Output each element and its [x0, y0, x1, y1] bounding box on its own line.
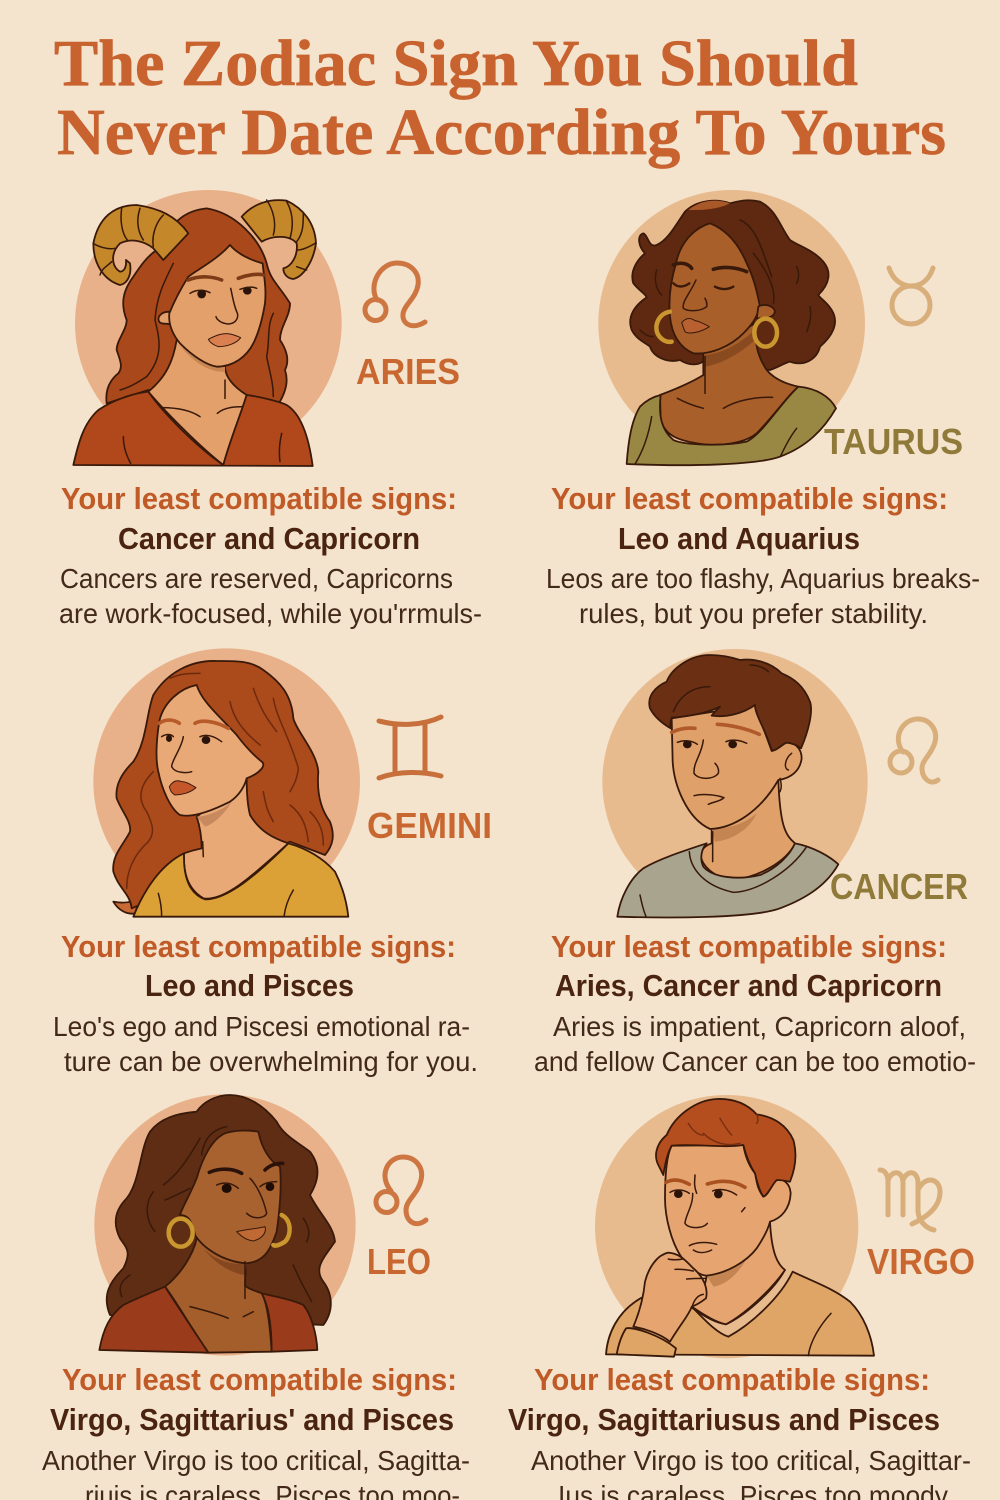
description: and fellow Cancer can be too emotio- [534, 1046, 976, 1077]
signs: Virgo, Sagittariusus and Pisces [508, 1402, 940, 1437]
label: aries: ARIES [356, 351, 460, 392]
signs: Leo and Pisces [145, 968, 354, 1003]
description: rules, but you prefer stability. [579, 598, 928, 629]
title [54, 27, 946, 169]
label: gemini: GEMINI [367, 805, 492, 846]
signs: Cancer and Capricorn [118, 521, 420, 556]
label: cancer: CANCER [830, 866, 968, 907]
description [42, 1445, 470, 1500]
portrait: aries woman with ram horns [73, 190, 342, 466]
description [534, 1011, 976, 1077]
heading: Your least compatible signs: [61, 481, 457, 516]
icon: zodiac symbol [379, 717, 441, 778]
icon: zodiac symbol [880, 1170, 940, 1230]
description: Another Virgo is too critical, Sagittar- [531, 1445, 971, 1476]
heading: Your least compatible signs: [551, 929, 947, 964]
signs: Virgo, Sagittarius' and Pisces [50, 1402, 454, 1437]
portrait: virgo young man with hand on chin [595, 1095, 874, 1358]
portrait: cancer young man [602, 649, 868, 917]
description: Leo's ego and Piscesi emotional ra- [53, 1011, 470, 1042]
description [546, 563, 980, 629]
portrait: gemini woman in profile [93, 648, 360, 917]
description: Leos are too flashy, Aquarius breaks- [546, 563, 980, 594]
description: ture can be overwhelming for you. [64, 1046, 478, 1077]
panel: virgo [508, 1095, 975, 1500]
signs: Aries, Cancer and Capricorn [555, 968, 942, 1003]
title: Never Date According To Yours [57, 96, 946, 169]
description: are work-focused, while you'rrmuls- [59, 598, 482, 629]
panel: cancer [534, 649, 976, 1077]
icon: zodiac symbol [365, 263, 425, 326]
heading: Your least compatible signs: [61, 929, 456, 964]
label: virgo: VIRGO [867, 1241, 975, 1282]
description [53, 1011, 478, 1077]
portrait: taurus woman with curly hair [598, 190, 865, 465]
label: leo: LEO [367, 1241, 431, 1282]
heading: Your least compatible signs: [551, 481, 948, 516]
heading: Your least compatible signs: [534, 1362, 930, 1397]
description: Aries is impatient, Capricorn aloof, [553, 1011, 966, 1042]
icon: zodiac symbol [890, 719, 938, 782]
heading: Your least compatible signs: [62, 1362, 457, 1397]
panel: leo [42, 1094, 470, 1500]
panel: aries [59, 190, 482, 629]
portrait: leo woman with long dark hair [94, 1094, 356, 1356]
description: Another Virgo is too critical, Sagitta- [42, 1445, 470, 1476]
signs: Leo and Aquarius [618, 521, 860, 556]
label: taurus: TAURUS [824, 421, 963, 462]
description [59, 563, 482, 629]
panel: taurus [546, 190, 980, 629]
description [531, 1445, 971, 1500]
description: Cancers are reserved, Capricorns [60, 563, 453, 594]
panel: gemini [53, 648, 492, 1077]
icon: zodiac symbol [376, 1157, 426, 1224]
icon: zodiac symbol [889, 268, 933, 324]
title: The Zodiac Sign You Should [54, 27, 858, 100]
